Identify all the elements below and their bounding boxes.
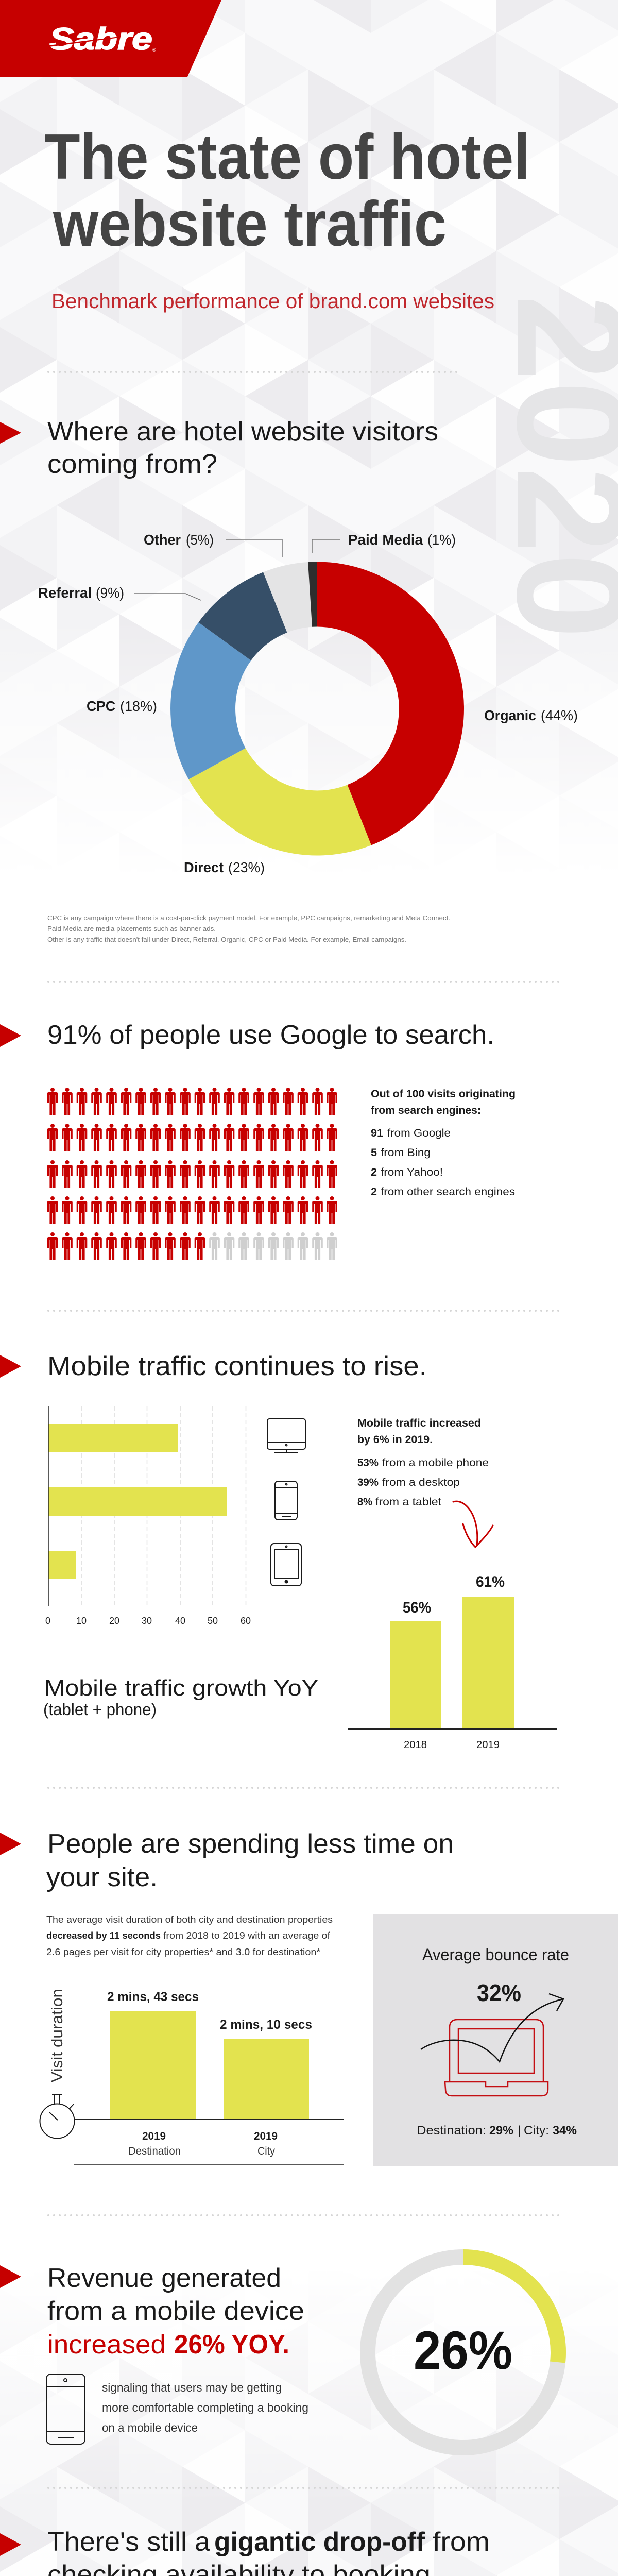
heading: time: People are spending less time on bbox=[47, 1829, 454, 1859]
heading: Google: 91% of people use Google to search. bbox=[47, 1020, 494, 1050]
heading: revenue bbox=[47, 2263, 304, 2360]
arrow marker bbox=[0, 1355, 21, 1378]
section: time on site bbox=[0, 1829, 618, 2166]
heading: revenue: 26% YOY. bbox=[174, 2330, 289, 2360]
heading: visitors: coming from? bbox=[47, 449, 217, 479]
arrow marker bbox=[0, 2265, 21, 2288]
heading: revenue: increased bbox=[47, 2330, 166, 2360]
panel: average bounce rate: 34% bbox=[553, 2124, 577, 2138]
bar chart: visit duration: 2 mins, 10 secs bbox=[220, 2018, 312, 2032]
heading: revenue: Revenue generated bbox=[47, 2263, 281, 2293]
footnote bbox=[47, 914, 450, 943]
label: Direct: Direct bbox=[184, 859, 224, 875]
mobile stats text: Mobile traffic increased bbox=[357, 1417, 481, 1429]
bar chart: visit duration bbox=[48, 1989, 344, 2165]
heading: time: your site. bbox=[46, 1862, 158, 1892]
label: Other: Other bbox=[144, 532, 181, 548]
title: website traffic bbox=[53, 189, 447, 260]
label: Referral: Referral bbox=[38, 585, 92, 601]
text: signaling: more comfortable completing a booking bbox=[102, 2401, 308, 2414]
mobile stats text: 8% bbox=[357, 1496, 372, 1508]
search engine list: 2 bbox=[371, 1186, 377, 1198]
heading: revenue: from a mobile device bbox=[47, 2296, 304, 2326]
heading: mobile: Mobile traffic continues to rise. bbox=[47, 1351, 427, 1381]
search engine list bbox=[371, 1088, 516, 1198]
bar chart: device share bbox=[45, 1406, 251, 1626]
footnote: Other is any traffic that doesn't fall under Direct, Referral, Organic, CPC or Paid Media. For example, Email campaigns. bbox=[47, 936, 406, 943]
label: Direct: (23%) bbox=[228, 859, 265, 875]
search engine list: from Google bbox=[387, 1127, 451, 1139]
mobile stats text: 39% bbox=[357, 1477, 379, 1488]
section: drop-off bbox=[0, 2527, 561, 2576]
bar chart: visit duration: 2019 bbox=[142, 2130, 166, 2142]
text: signaling: on a mobile device bbox=[102, 2421, 198, 2434]
section: Google search bbox=[0, 1020, 516, 1260]
heading: time bbox=[46, 1829, 454, 1892]
search engine list: Out of 100 visits originating bbox=[371, 1088, 516, 1100]
mobile stats text: from a mobile phone bbox=[382, 1457, 489, 1469]
icon: smartphone bbox=[46, 2374, 85, 2444]
section: mobile traffic bbox=[0, 1351, 557, 1751]
heading: drop-off: There's still a bbox=[47, 2527, 210, 2557]
paragraph: visit duration: decreased by 11 seconds bbox=[46, 1930, 161, 1941]
label: Referral: (9%) bbox=[96, 585, 124, 601]
text: signaling bbox=[102, 2381, 308, 2434]
bar chart: mobile growth: 2019 bbox=[476, 1739, 500, 1751]
chart title: growth bbox=[43, 1675, 318, 1719]
pictogram: 100 people, 91 red bbox=[47, 1088, 337, 1260]
paragraph: visit duration bbox=[46, 1914, 333, 1957]
chart title: growth: Mobile traffic growth YoY bbox=[44, 1675, 318, 1701]
paragraph: visit duration: 2.6 pages per visit for city properties* and 3.0 for destination* bbox=[46, 1947, 320, 1957]
bar chart: device share: 20 bbox=[109, 1616, 119, 1626]
section: mobile revenue bbox=[0, 2257, 558, 2448]
label: Paid Media: (1%) bbox=[427, 532, 456, 548]
search engine list: 5 bbox=[371, 1147, 377, 1159]
search engine list: from other search engines bbox=[381, 1186, 515, 1198]
label: Organic bbox=[484, 707, 578, 723]
paragraph: visit duration: from 2018 to 2019 with an average of bbox=[163, 1930, 331, 1941]
header banner with Sabre logo bbox=[0, 0, 221, 77]
icon: phone bbox=[275, 1481, 297, 1520]
bar chart: visit duration: Destination bbox=[128, 2145, 181, 2157]
search engine list: from Yahoo! bbox=[381, 1166, 443, 1178]
panel: average bounce rate: Destination: bbox=[417, 2124, 486, 2138]
arrow marker bbox=[0, 2533, 21, 2556]
label: Organic: (44%) bbox=[541, 707, 578, 723]
label: Other: (5%) bbox=[186, 532, 214, 548]
title bbox=[44, 122, 530, 260]
search engine list: from search engines: bbox=[371, 1105, 481, 1116]
icon: stopwatch bbox=[40, 2095, 74, 2138]
paragraph: visit duration: The average visit duration of both city and destination properties bbox=[46, 1914, 333, 1925]
chart title: growth: (tablet + phone) bbox=[43, 1700, 157, 1719]
label: CPC bbox=[87, 698, 157, 714]
bar chart: visit duration: 2019 bbox=[254, 2130, 278, 2142]
bar chart: visit duration: Visit duration bbox=[48, 1989, 66, 2082]
search engine list: 91 bbox=[371, 1127, 383, 1139]
panel: average bounce rate: 29% bbox=[489, 2124, 513, 2138]
panel: average bounce rate: Average bounce rate bbox=[422, 1945, 569, 1964]
label: Referral bbox=[38, 585, 201, 601]
text: signaling: signaling that users may be getting bbox=[102, 2381, 282, 2394]
bar chart: mobile growth: 56% bbox=[403, 1599, 431, 1616]
bar chart: visit duration: 2 mins, 43 secs bbox=[107, 1990, 199, 2004]
title: The state of hotel bbox=[44, 122, 530, 193]
arrow marker bbox=[0, 1024, 21, 1047]
label: CPC: CPC bbox=[87, 698, 115, 714]
label: Paid Media: Paid Media bbox=[348, 532, 423, 548]
label: Paid Media bbox=[312, 532, 456, 553]
subtitle: Benchmark performance of brand.com websites bbox=[52, 290, 494, 313]
label: Organic: Organic bbox=[484, 707, 536, 723]
bar chart: device share: 50 bbox=[208, 1616, 218, 1626]
mobile stats text: from a desktop bbox=[382, 1477, 460, 1488]
arrow marker bbox=[0, 1833, 21, 1855]
bar chart: mobile growth bbox=[348, 1573, 557, 1751]
bar chart: device share: 40 bbox=[175, 1616, 185, 1626]
mobile stats text: 53% bbox=[357, 1457, 379, 1469]
label: CPC: (18%) bbox=[120, 698, 157, 714]
bar chart: mobile growth: 2018 bbox=[404, 1739, 427, 1751]
donut chart bbox=[170, 562, 464, 855]
icon: laptop with bounce arrow bbox=[421, 1994, 563, 2096]
panel: average bounce rate bbox=[373, 1914, 618, 2166]
header banner with Sabre logo: Sabre bbox=[49, 22, 152, 56]
label: Direct bbox=[184, 859, 265, 875]
icon: desktop monitor bbox=[267, 1419, 305, 1452]
bar chart: device share: 60 bbox=[241, 1616, 251, 1626]
section: visitor sources bbox=[0, 417, 578, 943]
heading: drop-off: gigantic drop-off bbox=[214, 2527, 425, 2557]
footnote: CPC is any campaign where there is a cost-per-click payment model. For example, PPC campaigns, remarketing and Meta Connect. bbox=[47, 914, 450, 922]
panel: average bounce rate: 32% bbox=[477, 1979, 521, 2006]
heading: drop-off: from bbox=[433, 2527, 490, 2557]
header banner with Sabre logo: ® bbox=[152, 47, 156, 53]
bar chart: visit duration: City bbox=[258, 2145, 275, 2157]
mobile stats text: by 6% in 2019. bbox=[357, 1434, 433, 1446]
panel: average bounce rate: | bbox=[518, 2124, 521, 2138]
bar chart: device share: 10 bbox=[76, 1616, 87, 1626]
search engine list: from Bing bbox=[381, 1147, 431, 1159]
arrow: hand-drawn red bbox=[453, 1501, 493, 1547]
bar chart: device share: 30 bbox=[142, 1616, 152, 1626]
bar chart: device share: 0 bbox=[45, 1616, 50, 1626]
bar chart: mobile growth: 61% bbox=[476, 1573, 505, 1590]
heading: drop-off bbox=[47, 2527, 490, 2576]
panel: average bounce rate: City: bbox=[524, 2124, 549, 2138]
heading: visitors bbox=[47, 417, 438, 479]
search engine list: 2 bbox=[371, 1166, 377, 1178]
mobile stats text bbox=[357, 1417, 489, 1508]
footnote: Paid Media are media placements such as banner ads. bbox=[47, 925, 216, 933]
ring chart: 26%: 26% bbox=[414, 2320, 512, 2381]
mobile stats text: from a tablet bbox=[375, 1496, 441, 1508]
label: Other bbox=[144, 532, 282, 557]
ring chart: 26% bbox=[368, 2257, 558, 2448]
icon: tablet bbox=[271, 1544, 301, 1586]
heading: visitors: Where are hotel website visitors bbox=[47, 417, 438, 447]
arrow marker bbox=[0, 422, 21, 444]
